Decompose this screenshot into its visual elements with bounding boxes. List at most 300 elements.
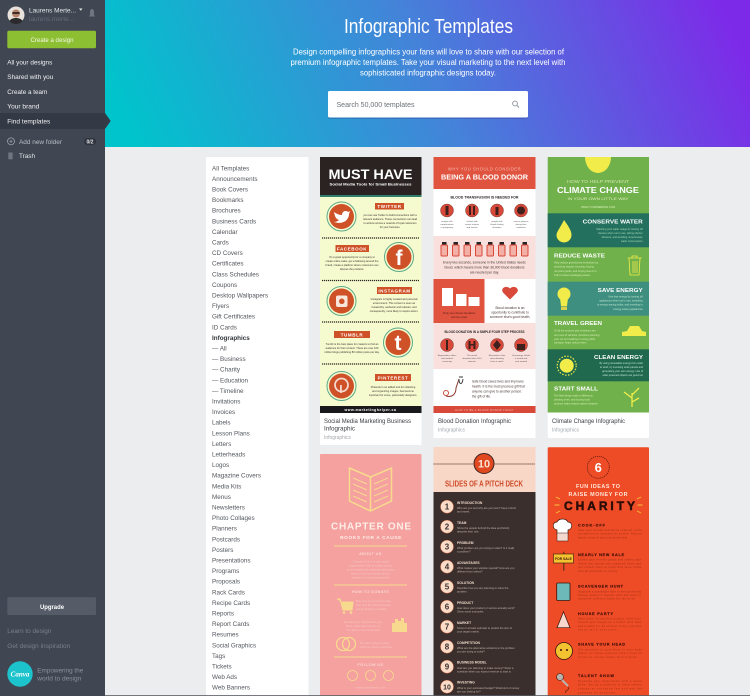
card caption <box>552 418 625 434</box>
how to donate <box>334 590 407 658</box>
travel green: transport helps reduce them <box>554 340 586 344</box>
tagline: world to design <box>36 676 82 683</box>
idea: talent show: charge an entrance fee and ask the <box>578 687 643 691</box>
category list panel: Announcements <box>212 176 258 183</box>
category list panel: Posters <box>212 547 233 554</box>
card caption <box>438 418 511 434</box>
idea: scavenger hunt: Organize a scavenger hunt in the community <box>578 589 642 593</box>
category list panel: Tickets <box>212 664 232 670</box>
navigation menu: Your brand <box>7 104 40 111</box>
clean energy: By using renewable energy from solar <box>599 361 643 365</box>
four step process: The actual <box>467 354 478 357</box>
idea: cook-off: person to join in and vote for the best. <box>578 536 628 540</box>
idea: house party: enjoy with everyone. <box>578 628 618 632</box>
category list panel: Class Schedules <box>212 271 259 278</box>
category list panel: Tags <box>212 653 225 660</box>
category list panel: Business Cards <box>212 218 256 225</box>
numbered list: Describe how you are planning to solve the <box>457 586 509 590</box>
category list panel: Recipe Cards <box>212 600 250 607</box>
blood donor header <box>434 157 536 189</box>
card heading: MUST HAVE <box>328 167 412 182</box>
numbered list: describe their role. <box>457 530 479 534</box>
four step process: Registration, ethics <box>438 354 457 357</box>
card caption: Blood Donation Infographic <box>438 418 511 425</box>
charity heading: FUN IDEAS TO <box>576 484 620 490</box>
idea: house party: HOUSE PARTY <box>578 612 613 616</box>
idea: shave your head <box>556 642 643 660</box>
conserve water: CONSERVE WATER <box>583 220 644 226</box>
stethoscope callout: health. It is the most precious gift that <box>472 384 525 388</box>
numbered list: you are trying to solve? <box>457 650 485 654</box>
card caption: Infographics <box>552 428 579 434</box>
dotted dividers <box>322 238 419 364</box>
category list panel: Report Cards <box>212 621 249 628</box>
icon: earth <box>585 157 611 173</box>
save energy: Use less energy by turning off <box>608 294 643 298</box>
red bar chart panel: can be used <box>451 315 467 319</box>
category list panel: Calendar <box>212 229 238 236</box>
card: social media marketing <box>320 157 422 445</box>
heart panel: opportunity to contribute to <box>491 310 529 314</box>
numbered list: 5 <box>445 582 450 592</box>
idea: cook-off: COOK-OFF <box>578 524 606 528</box>
clean energy: CLEAN ENERGY <box>594 355 643 361</box>
numbered list: 7 <box>445 622 450 632</box>
four step process: after donating <box>490 357 504 360</box>
upgrade button <box>7 597 96 615</box>
facebook section: It's a great opportunity for a company to <box>329 255 375 259</box>
blood donor header: WHY YOU SHOULD CONSIDER <box>448 166 521 172</box>
conserve water: water consumption <box>621 239 643 243</box>
category list panel: Logos <box>212 462 229 469</box>
reduce waste: bulk to lessen packaging waste <box>554 273 590 277</box>
idea: nearly new sale: you collect them to resell and raise funds <box>578 565 642 569</box>
idea: nearly new sale: Collect your friend's goods with charity sale <box>578 558 642 562</box>
idea: shave your head: Get sponsors to contribute to your head <box>578 647 643 651</box>
navigation menu: Create a team <box>7 89 47 96</box>
idea: house party: and a raffle for all of them to buy into and <box>578 624 642 628</box>
user name: Laurens Merte... <box>29 8 76 14</box>
save energy: to energy-saving bulbs, and investing in <box>597 302 643 306</box>
numbered list: What are the alternative solutions to the problem <box>457 646 516 650</box>
idea: cook-off <box>553 519 643 541</box>
climate heading: WWW.YOURWEBSITE.COM <box>581 205 615 209</box>
numbered list: different from others? <box>457 570 483 574</box>
bottles section: are needed per day. <box>470 270 499 274</box>
transfusion section: in pregnancy <box>441 226 454 229</box>
category list panel: Gift Certificates <box>212 314 255 321</box>
four step process: have a snack <box>491 361 504 363</box>
numbered list: schedule when you expect revenue to start in. <box>457 670 512 674</box>
icon: plant <box>624 388 639 407</box>
four step process <box>434 323 536 369</box>
conserve water: showers, and avoiding unnecessary <box>601 235 643 239</box>
bottles section: blood, which means more than 36,000 blood donations <box>444 266 525 270</box>
banner description <box>290 46 566 78</box>
card: chapter one <box>320 454 422 696</box>
numbered list: 8 <box>445 642 450 652</box>
about us: and educational materials and gives <box>347 568 395 572</box>
canva logo <box>7 661 33 687</box>
reduce waste: recycled goods, and buying less or in <box>554 269 597 273</box>
category list panel: Presentations <box>212 558 251 564</box>
category list panel: Postcards <box>212 536 240 543</box>
bottles section: Every two seconds, someone in the United States needs <box>443 260 526 264</box>
red footer strip <box>434 406 536 413</box>
travel green: your car and walking or using public <box>554 337 596 341</box>
header banner <box>105 0 750 147</box>
canva logo: Canva <box>11 670 30 678</box>
category list panel: Programs <box>212 568 239 575</box>
numbered list: COMPETITION <box>457 641 481 645</box>
idea: scavenger hunt <box>557 583 642 601</box>
title: Infographic Templates <box>344 16 513 38</box>
reduce waste <box>554 254 642 277</box>
banner description: Design compelling infographics your fans will love to share with our selection of <box>293 46 565 56</box>
numbered list: and sweet. <box>457 510 470 514</box>
follow us: FOLLOW US <box>358 663 384 667</box>
category list panel: Planners <box>212 526 237 533</box>
facebook section: discuss the products. <box>340 267 364 271</box>
category list panel: Brochures <box>212 208 241 215</box>
idea: nearly new sale: where they donate any unwanted items and <box>578 561 642 565</box>
idea: talent show: audience for donations. <box>578 690 616 694</box>
clean energy: generating your own energy. Use of <box>602 369 643 373</box>
four step process: BLOOD DONATION IN A SIMPLE FOUR STEP PROCESS <box>444 330 524 334</box>
start small: START SMALL <box>554 386 598 392</box>
numbered list: TEAM <box>457 521 467 525</box>
numbered list: your target market. <box>457 630 480 634</box>
how to donate: from the list with proceeds <box>356 603 391 607</box>
pinterest section: Pinterest is an added tool for collecting <box>371 385 416 389</box>
numbered list: Show the people behind the idea and briefly <box>457 526 510 530</box>
idea: house party: friends and charge for a ticket, with food <box>578 620 642 624</box>
numbered list: INVESTING <box>457 680 475 684</box>
instagram section: environment. This content is seen as <box>373 301 416 305</box>
idea: house party <box>557 612 642 632</box>
twitter section <box>327 202 418 231</box>
idea: shave your head: shave. Or shave someone else's head for <box>578 651 642 655</box>
add new folder: 0/2 <box>87 140 94 146</box>
charity heading: CHARITY <box>564 499 635 513</box>
trash: Trash <box>19 153 35 160</box>
category list panel: — All <box>212 346 227 352</box>
twitter section: relevant audience. These connections can lead <box>363 217 418 221</box>
transfusion section <box>440 196 529 229</box>
idea: scavenger hunt: charge teams to register then ask them to <box>578 593 642 597</box>
category list panel: Resumes <box>212 632 239 639</box>
idea: house party: Have some fun and host a party. Invite your <box>578 616 641 620</box>
pinterest section: PINTEREST <box>378 376 408 380</box>
numbered list: MARKET <box>457 621 471 625</box>
card caption: Climate Change Infographic <box>552 418 625 425</box>
numbered list: Know or at least estimate to predict the size of <box>457 626 512 630</box>
bottles section <box>434 236 536 279</box>
category list panel: Invitations <box>212 398 240 406</box>
twitter section: you can use Twitter to build connections with a <box>363 213 417 217</box>
numbered list: How are you planning to make money? Show a <box>457 666 514 670</box>
icon: car <box>622 326 646 336</box>
idea: talent show: show. Set up a platform to raise money, <box>578 683 642 687</box>
category list panel: Web Ads <box>212 674 237 681</box>
travel green <box>554 321 646 344</box>
numbered list: 10 <box>443 684 451 692</box>
numbered list: Who are you and why are you here? Keep it short <box>457 506 516 510</box>
travel green: Of all the sources gas emissions are <box>554 328 596 332</box>
start small: produce helps reduce carbon footprint <box>554 402 598 406</box>
instagram section: consequently, more likely to inspire action. <box>370 309 419 313</box>
numbered list: How does your product or service actually work? <box>457 606 515 610</box>
tumblr section: million blogs publishing 80 million posts per day. <box>324 350 380 354</box>
travel green: our most of vehicles, therefore planning <box>554 333 600 337</box>
red bar chart panel <box>434 279 484 323</box>
facebook section: f <box>396 247 404 270</box>
heart panel: someone else's good health. <box>490 315 530 319</box>
four step process: is tested and <box>515 357 528 360</box>
four step process: minutes <box>468 360 477 363</box>
twitter section: to actions across a network of loyal customers <box>363 221 417 225</box>
clean energy <box>548 349 649 381</box>
category list panel: Cards <box>212 240 229 246</box>
save energy: appliances when not in use, switching <box>599 298 643 302</box>
how to donate: our sites in the local area <box>346 628 380 632</box>
category list panel <box>206 157 308 696</box>
pitch deck header: SLIDES OF A PITCH DECK <box>445 478 524 488</box>
idea: nearly new sale: FOR SALE <box>555 557 573 561</box>
transfusion section: people with <box>441 220 453 223</box>
category list panel: Flyers <box>212 303 229 310</box>
active row: find templates <box>0 113 111 129</box>
category list panel: — Charity <box>212 367 241 374</box>
category list panel: Photo Collages <box>212 515 255 522</box>
reduce waste: practicing regular recycling, buying <box>554 264 594 268</box>
card caption: Infographics <box>438 428 465 434</box>
follow us <box>348 663 394 690</box>
facebook section: brand, create a platform where customers can <box>326 263 379 267</box>
card: social media marketing: Social Media Tools for Small Businesses <box>330 182 412 186</box>
climate heading: CLIMATE CHANGE <box>557 185 639 195</box>
idea: shave your head: funds on social media with friends. <box>578 655 638 659</box>
numbered list: 2 <box>445 522 450 532</box>
instagram section: INSTAGRAM <box>378 288 411 294</box>
clean energy: solar powered objects are good too <box>602 373 644 377</box>
start small: The little things make a difference: <box>554 394 594 398</box>
twitter section: for your business. <box>380 225 401 229</box>
banner description: premium infographic templates. Take your visual marketing to the next level with <box>290 57 566 67</box>
numbered list: problem. <box>457 590 468 594</box>
category list panel: Rack Cards <box>212 589 245 596</box>
how to donate: fund our book programs <box>360 645 392 649</box>
transfusion section: treatment <box>516 226 526 229</box>
card: chapter one: BOOKS FOR A CAUSE <box>340 535 402 541</box>
category list panel: — Business <box>212 356 246 363</box>
numbered list: a problem? <box>457 550 471 554</box>
how to donate: Buy one of our new books <box>356 599 391 603</box>
category list panel: Labels <box>212 420 231 427</box>
navigation menu <box>7 59 54 126</box>
tumblr section <box>324 328 412 357</box>
about us <box>334 546 407 586</box>
category list panel: Newsletters <box>212 504 245 512</box>
category list panel: Lesson Plans <box>212 430 250 437</box>
red bar chart panel: Only one blood donation <box>443 311 476 315</box>
category list panel: Reports <box>212 610 234 618</box>
card: pitch deck <box>434 447 536 696</box>
start small: planting trees, and buying local <box>554 398 590 402</box>
card caption: Infographic <box>324 426 355 432</box>
blood donor header: BEING A BLOOD DONOR <box>441 172 529 182</box>
numbered list: PROBLEM <box>457 541 474 545</box>
numbered list: INTRODUCTION <box>457 501 483 505</box>
conserve water <box>548 213 649 247</box>
idea: cook-off: Take your friends and family cook-off, invite <box>578 528 643 532</box>
category list panel: Book Covers <box>212 186 248 194</box>
stethoscope callout: the gift of life. <box>472 394 491 398</box>
stethoscope callout: anyone can give to another person: <box>472 390 522 394</box>
numbered list: Show some examples. <box>457 610 484 614</box>
sidebar links: Learn to design <box>7 628 52 635</box>
idea: talent show: Organize your local talent with a talent <box>578 679 642 683</box>
transfusion section: severe injuries <box>465 223 480 226</box>
card caption: Social Media Marketing Business <box>324 418 411 425</box>
search box: Search 50,000 templates <box>336 100 415 109</box>
charity heading: RAISE MONEY FOR <box>568 492 628 498</box>
pinterest section: and organizing images, has become <box>372 389 414 393</box>
numbered list: 1 <box>445 502 450 512</box>
conserve water: Washing your water usage by turning off <box>596 227 643 231</box>
transfusion section: during their <box>516 223 527 226</box>
icon: open book <box>350 468 392 511</box>
how to donate: HOW TO DONATE <box>352 590 389 594</box>
idea: talent show: TALENT SHOW <box>578 674 614 678</box>
card: charity <box>548 447 649 696</box>
how to donate: going directly to charity <box>356 607 387 611</box>
sidebar links: Get design inspiration <box>7 643 71 650</box>
how to donate: Donate money to help <box>360 641 390 645</box>
category list panel: Social Graphics <box>212 642 256 649</box>
create a design button: Create a design <box>30 37 74 44</box>
sidebar: laurens.merte... <box>29 16 74 23</box>
user avatar <box>8 6 24 24</box>
category list panel: All Templates <box>212 165 249 172</box>
category list panel: Media Kits <box>212 483 241 490</box>
how to donate: have, drop them at one of <box>346 624 380 628</box>
about us: back to the community and to <box>351 572 390 576</box>
follow us: www.yourwebsite.com <box>356 686 386 690</box>
tumblr section: audience for their content. There are over 100 <box>326 346 379 350</box>
transfusion section: complications <box>440 223 455 226</box>
navigation menu: All your designs <box>7 59 52 66</box>
add new folder: Add new folder <box>19 139 62 146</box>
category list panel: Letterheads <box>212 452 245 458</box>
four step process: Recreation: relax <box>489 354 506 357</box>
idea: talent show <box>556 674 643 694</box>
category list panel: Web Banners <box>212 685 250 692</box>
category list panel: ID Cards <box>212 324 237 331</box>
chapter heading: CHAPTER ONE <box>331 522 411 532</box>
facebook section: create online sales, get a following around the <box>326 259 379 263</box>
tagline <box>36 667 84 683</box>
tumblr section: t <box>394 332 402 355</box>
category list panel: Coupons <box>212 282 237 289</box>
tagline: Empowering the <box>37 667 84 674</box>
climate heading: HOW TO HELP PREVENT <box>567 179 629 184</box>
about us: students in need everywhere <box>351 576 390 580</box>
idea: nearly new sale: NEARLY NEW SALE <box>578 553 624 557</box>
card footer strip <box>320 406 422 413</box>
icon: bell <box>89 9 95 16</box>
card: climate change <box>548 157 649 438</box>
category list panel: Proposals <box>212 579 240 586</box>
numbered list: 6 <box>445 602 450 612</box>
idea: scavenger hunt: complete different tasks for the prize. <box>578 597 636 601</box>
save energy <box>548 282 649 316</box>
reduce waste: REDUCE WASTE <box>554 254 605 260</box>
about us: organization that provides books <box>349 564 393 568</box>
category list panel: — Education <box>212 377 249 384</box>
about us: ABOUT US <box>359 552 382 556</box>
numbered list: 4 <box>445 562 450 572</box>
card: blood donation: HOW TO BE A BLOOD DONOR TODAY <box>455 408 514 412</box>
climate heading <box>557 179 639 209</box>
upgrade button: Upgrade <box>40 604 64 611</box>
clean energy: to wind, by investing solar panels and <box>600 365 644 369</box>
numbered list: BUSINESS MODEL <box>457 660 487 664</box>
category list panel: Certificates <box>212 261 244 268</box>
charity heading <box>554 484 642 513</box>
numbered list: PRODUCT <box>457 601 473 605</box>
numbered list: SOLUTION <box>457 581 475 585</box>
pitch deck header: 10 <box>478 458 490 470</box>
transfusion section: BLOOD TRANSFUSION IS NEEDED FOR <box>450 196 519 200</box>
transfusion section: people with <box>491 220 503 223</box>
heart panel: Blood donation is an <box>496 306 525 310</box>
numbered list: are you looking for? <box>457 690 481 694</box>
transfusion section: disorders <box>492 226 502 229</box>
category list panel: Infographics <box>212 335 250 342</box>
pitch deck header <box>434 447 536 492</box>
instagram section: Instagram is highly curated and personal <box>371 297 418 301</box>
numbered list: 9 <box>445 662 450 672</box>
numbered list: What makes your solution special? How are you <box>457 566 515 570</box>
transfusion section: victims with <box>466 220 478 223</box>
four step process: donation takes 8-10 <box>462 357 482 360</box>
numbered list: What is your estimated budget? What kind of money <box>457 686 520 690</box>
instagram section <box>327 286 419 316</box>
save energy: energy-saving appliances <box>613 307 643 311</box>
climate heading: IN YOUR OWN LITTLE WAY <box>568 197 629 201</box>
reduce waste: Help reduce greenhouse emissions by <box>554 260 599 264</box>
category list panel: — Timeline <box>212 388 244 395</box>
category list panel: CD Covers <box>212 250 243 257</box>
numbered list: ADVANTAGES <box>457 561 480 565</box>
transfusion section: cancer patients <box>514 220 529 223</box>
category list panel: Bookmarks <box>212 197 244 204</box>
tumblr section: TUMBLR <box>341 332 363 338</box>
transfusion section: blood clotting <box>491 223 504 226</box>
numbered list: What problem are you trying to solve? Is it really <box>457 546 515 550</box>
pinterest section <box>327 372 417 400</box>
start small <box>554 386 639 407</box>
trash <box>8 152 35 160</box>
sidebar links <box>7 628 71 650</box>
card: blood donation <box>434 157 536 438</box>
tumblr section: Tumblr is the best place for creators to find an <box>326 342 379 346</box>
category list panel: Letters <box>212 441 231 448</box>
twitter section: TWITTER <box>377 204 402 209</box>
idea: nearly new sale <box>554 552 642 573</box>
search box <box>328 91 528 119</box>
